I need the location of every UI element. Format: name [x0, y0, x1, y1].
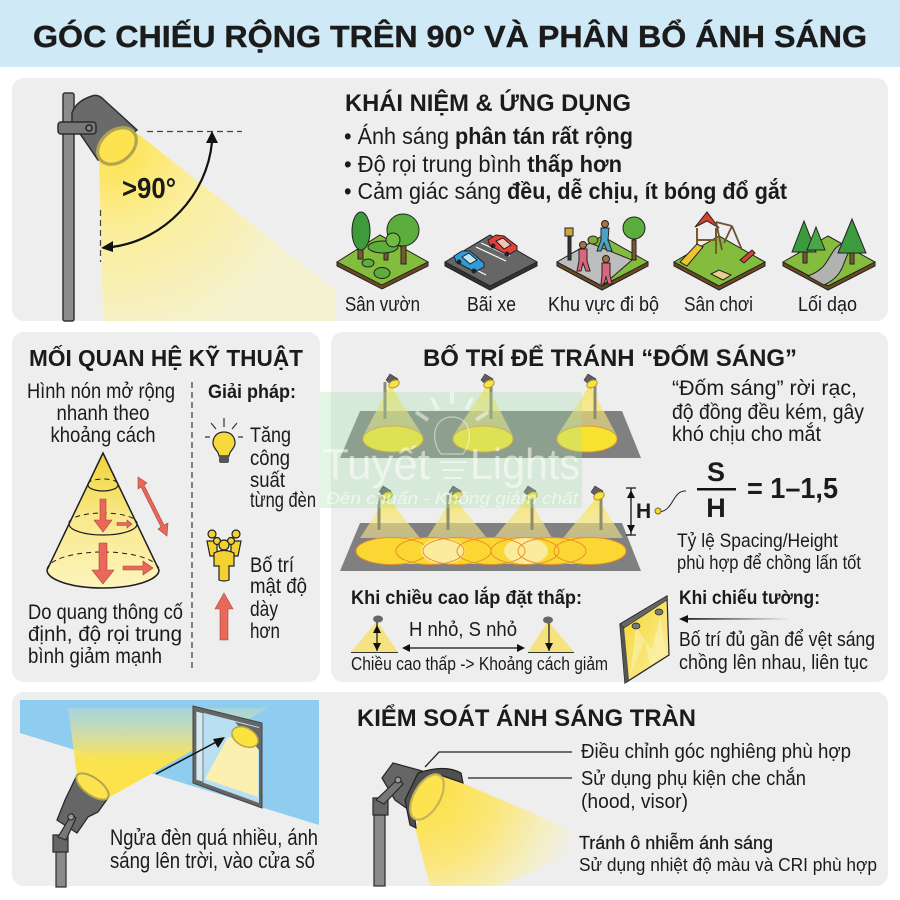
formula: S/H ratio: = 1–1,5 — [747, 473, 838, 505]
heading: concept: KHÁI NIỆM & ỨNG DỤNG — [345, 89, 631, 117]
heading: spill light: KIỂM SOÁT ÁNH SÁNG TRÀN — [357, 704, 696, 732]
sub-block: low mounting height — [351, 587, 608, 674]
icon: lit wall — [620, 596, 669, 683]
icon: garden — [337, 212, 428, 289]
text: light pollution — [579, 832, 877, 875]
icon: pedestrian area — [557, 217, 648, 290]
diagram: lamp with hood — [373, 752, 600, 886]
connector: dot to formula — [655, 491, 686, 514]
icon: group of people — [207, 530, 241, 581]
sub-block: low mounting height: Khi chiều cao lắp đặt thấp: — [351, 587, 582, 609]
diagram: lamp tilted too high — [20, 700, 319, 887]
text: tilt warning — [110, 825, 318, 873]
text: light pollution: Tránh ô nhiễm ánh sáng — [579, 832, 773, 853]
formula: S/H ratio — [697, 457, 838, 523]
panel: technical relationship — [12, 332, 320, 682]
text: hot spot description: độ đồng đều kém, gây — [672, 400, 864, 424]
panel: concept and applications — [12, 78, 888, 321]
watermark: Lights — [470, 440, 580, 489]
icon: parking lot — [445, 235, 537, 290]
text: hot spot description — [672, 376, 864, 446]
bullet list: • Cảm giác sáng đều, dễ chịu, ít bóng đổ gắt — [344, 177, 787, 204]
sub-block: wall lighting — [679, 587, 875, 674]
header band with title: GÓC CHIẾU RỘNG TRÊN 90° VÀ PHÂN BỔ ÁNH SÁNG — [33, 18, 867, 54]
header band with title — [0, 0, 900, 67]
label: parking lot: Bãi xe — [467, 294, 516, 316]
text: cone widening — [27, 380, 175, 447]
sub-block: low mounting height: H nhỏ, S nhỏ — [409, 618, 517, 641]
label: walking path: Lối dạo — [798, 294, 857, 316]
text: denser layout — [250, 554, 307, 643]
dimension: height H — [626, 488, 651, 535]
text: denser layout: Bố trí — [250, 554, 294, 577]
bullet list: • Ánh sáng phân tán rất rộng — [344, 123, 633, 149]
label: garden: Sân vườn — [345, 294, 420, 316]
watermark — [320, 392, 582, 508]
heading: solution: Giải pháp: — [208, 381, 296, 403]
text: illuminance falls: Do quang thông cố — [28, 601, 183, 624]
arrow: up — [215, 593, 233, 640]
text: control measures: (hood, visor) — [581, 790, 688, 813]
formula: S/H ratio: S — [707, 457, 725, 487]
label: playground: Sân chơi — [684, 294, 753, 316]
text: cone widening: khoảng cách — [50, 424, 156, 447]
dimension: height H: H — [636, 500, 651, 523]
heading: layout: BỐ TRÍ ĐỂ TRÁNH “ĐỐM SÁNG” — [423, 344, 797, 372]
text: denser layout: dày — [250, 598, 278, 621]
text: ratio explanation: Tỷ lệ Spacing/Height — [677, 531, 839, 552]
text: control measures: Sử dụng phụ kiện che chắn — [581, 767, 806, 790]
sub-block: wall lighting: Bố trí đủ gần để vệt sáng — [679, 629, 875, 651]
icon: walking path — [783, 219, 875, 290]
text: denser layout: mật độ — [250, 575, 307, 598]
text: increase power: công — [250, 447, 290, 470]
sub-block: wall lighting: Khi chiếu tường: — [679, 587, 820, 609]
text: tilt warning: Ngửa đèn quá nhiều, ánh — [110, 825, 318, 850]
panel: layout to avoid hot spots — [331, 332, 888, 683]
formula: S/H ratio: H — [706, 493, 726, 523]
text: increase power: Tăng — [250, 424, 291, 447]
diagram: wide beam lamp with angle: >90° — [122, 173, 176, 205]
diagram: wide beam lamp with angle — [58, 93, 335, 321]
icon: playground — [674, 212, 765, 290]
bullet list: • Độ rọi trung bình thấp hơn — [344, 151, 622, 177]
diagram: overlapping spots — [340, 486, 641, 571]
text: control measures: Điều chỉnh góc nghiêng phù hợp — [581, 740, 851, 763]
text: increase power: từng đèn — [250, 489, 316, 512]
text: tilt warning: sáng lên trời, vào cửa sổ — [110, 848, 315, 873]
text: light pollution: Sử dụng nhiệt độ màu và CRI phù hợp — [579, 854, 877, 875]
text: cone widening: nhanh theo — [56, 402, 150, 425]
text: cone widening: Hình nón mở rộng — [27, 380, 175, 403]
text: denser layout: hơn — [250, 620, 280, 643]
sub-block: low mounting height: Chiều cao thấp -> Khoảng cách giảm — [351, 654, 608, 674]
text: increase power: suất — [250, 469, 285, 492]
diagram: spaced spots — [340, 374, 641, 458]
sub-block: wall lighting: chồng lên nhau, liên tục — [679, 652, 868, 674]
bullet list — [344, 123, 787, 204]
text: increase power — [250, 424, 316, 512]
watermark: Tuyết — [322, 440, 430, 489]
text: control measures — [581, 740, 851, 813]
label: pedestrian area: Khu vực đi bộ — [548, 294, 659, 316]
text: ratio explanation — [677, 531, 862, 574]
text: ratio explanation: phù hợp để chồng lấn tốt — [677, 553, 862, 574]
icon: light bulb — [205, 418, 243, 463]
panel: spill light control — [12, 692, 888, 887]
text: illuminance falls: bình giảm mạnh — [28, 645, 162, 668]
text: illuminance falls — [28, 601, 183, 668]
text: hot spot description: khó chịu cho mắt — [672, 421, 821, 446]
text: hot spot description: “Đốm sáng” rời rạc, — [672, 376, 857, 400]
watermark: Đèn chuẩn - Không giảm chất — [326, 489, 579, 508]
text: illuminance falls: định, độ rọi trung — [28, 623, 182, 646]
diagram: light cone — [47, 453, 168, 588]
heading: technical relationship: MỐI QUAN HỆ KỸ THUẬT — [29, 344, 303, 371]
